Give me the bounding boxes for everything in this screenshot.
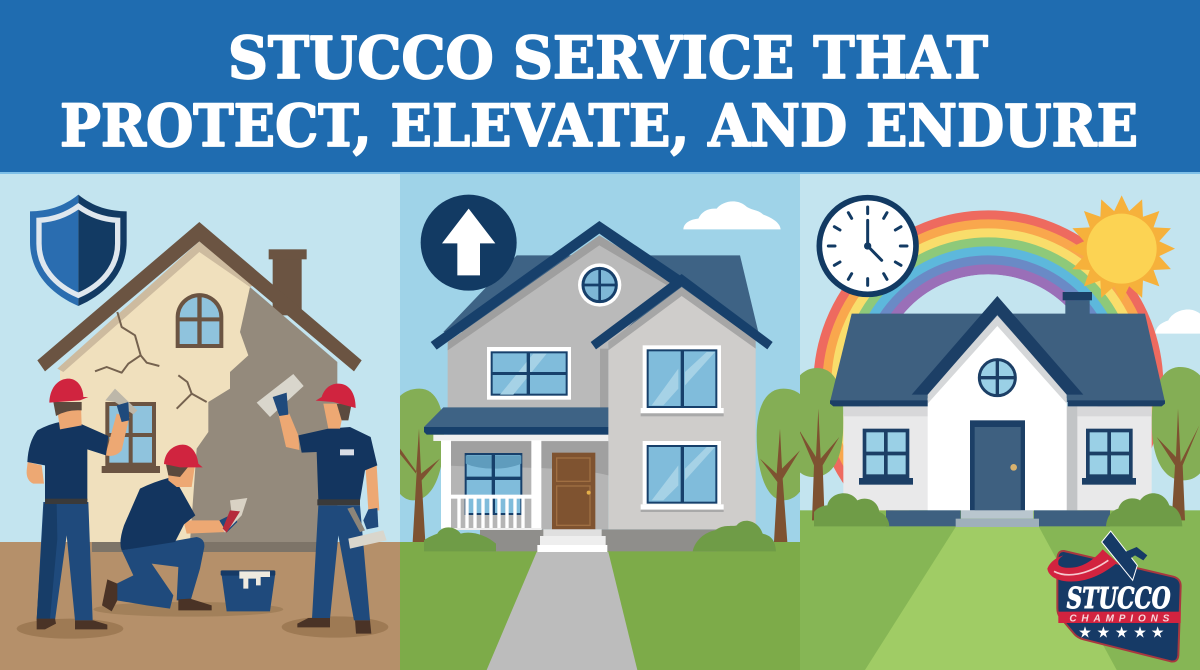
damaged house	[37, 222, 362, 552]
door	[552, 453, 595, 529]
logo stars: ★	[1078, 623, 1092, 641]
logo subtitle: CHAMPIONS	[1069, 613, 1170, 624]
chimney	[269, 249, 307, 315]
title banner	[0, 0, 1200, 172]
title text	[60, 24, 1138, 160]
icon: sun	[1068, 195, 1175, 302]
door	[970, 420, 1025, 510]
panel: elevate	[400, 172, 800, 670]
steps	[537, 529, 607, 552]
porch columns and railing	[433, 435, 608, 441]
icon: clock	[819, 198, 916, 294]
tree: left	[387, 389, 444, 542]
title text: STUCCO SERVICE THAT	[228, 24, 988, 92]
eaves	[830, 400, 1165, 406]
title text: PROTECT, ELEVATE, AND ENDURE	[60, 92, 1138, 160]
lawn	[800, 510, 1200, 670]
stucco wing	[608, 290, 756, 529]
upper right window	[641, 345, 724, 416]
logo: Stucco Champions	[1047, 531, 1181, 662]
lower right window	[641, 441, 724, 512]
back roof	[443, 255, 758, 332]
logo stars: ★	[1151, 623, 1165, 641]
logo stars	[1078, 623, 1165, 641]
shrubs	[814, 493, 1182, 526]
rainbow	[818, 215, 1158, 555]
worker: kneeling	[93, 445, 283, 617]
shrubs	[424, 521, 776, 551]
round window	[578, 263, 621, 307]
icon: shield	[30, 195, 127, 306]
main wall	[448, 240, 673, 439]
single-storey house	[814, 292, 1182, 527]
upper left window	[487, 347, 571, 400]
worker: right	[257, 374, 388, 638]
porch roof	[424, 407, 608, 427]
walkway	[487, 552, 637, 670]
tree: right	[1152, 367, 1200, 520]
tree: left	[787, 368, 843, 520]
lower window	[102, 402, 160, 473]
cloud	[683, 201, 781, 229]
logo stars: ★	[1133, 623, 1147, 641]
arched window	[176, 293, 223, 348]
foundation and steps	[886, 510, 1110, 527]
front gable	[928, 319, 1067, 510]
foundation	[480, 529, 717, 551]
icon: up arrow badge	[421, 195, 517, 291]
porch window	[466, 454, 521, 514]
logo stars: ★	[1115, 623, 1129, 641]
roof trim	[431, 221, 680, 350]
walls	[843, 406, 1152, 510]
logo stars: ★	[1096, 623, 1110, 641]
panel: protect	[0, 172, 400, 670]
left window	[859, 429, 913, 485]
swoosh	[1047, 549, 1117, 582]
two-storey house	[424, 221, 776, 552]
cracks	[95, 312, 207, 409]
right window	[1082, 429, 1136, 485]
cloud	[1155, 309, 1200, 334]
panel: endure	[800, 172, 1200, 670]
trowel	[1102, 531, 1147, 580]
chimney	[1063, 292, 1092, 317]
round window	[979, 360, 1015, 396]
tree: right	[757, 389, 813, 542]
main roof	[830, 314, 1165, 402]
worker: left	[17, 379, 137, 639]
porch	[424, 407, 608, 530]
paint bucket	[221, 570, 275, 611]
